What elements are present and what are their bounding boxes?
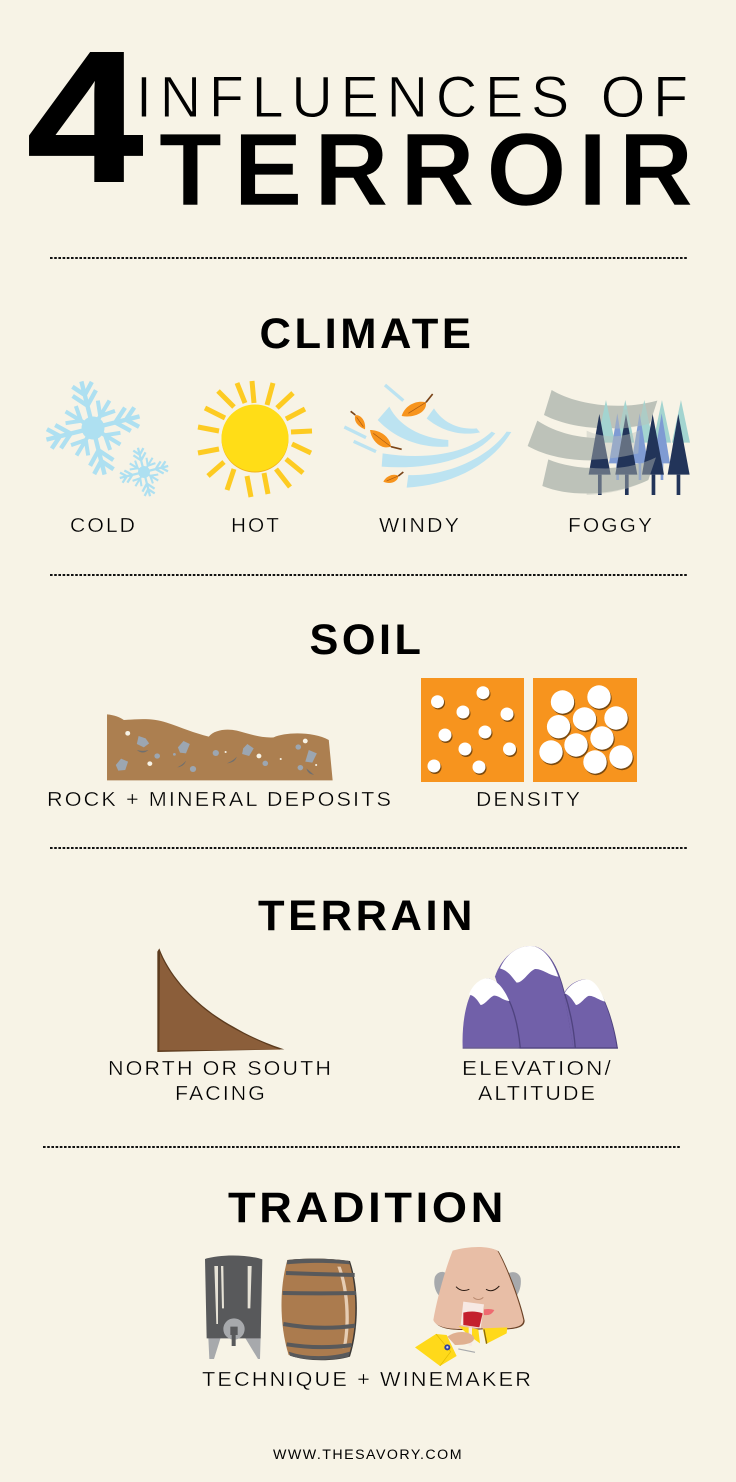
middle blue trees (609, 413, 670, 480)
heading: climate: CLIMATE (260, 310, 474, 358)
label: north or south facing (108, 1057, 333, 1105)
icon: snowy mountains (463, 946, 618, 1049)
label: foggy: FOGGY (568, 514, 654, 537)
fog bands behind trees (528, 390, 657, 494)
jacket (459, 1326, 507, 1344)
icon: high density soil square (533, 678, 637, 782)
wine glass (461, 1302, 484, 1328)
head (435, 1248, 525, 1330)
heading: tradition: TRADITION (228, 1184, 507, 1232)
icon: sun (198, 381, 312, 497)
hand (447, 1332, 474, 1345)
icon: fog and trees (528, 390, 690, 495)
label: north or south facing: FACING (175, 1082, 267, 1105)
label: hot: HOT (231, 514, 281, 537)
title numeral 4: 4 (27, 14, 143, 221)
label: cold: COLD (70, 514, 137, 537)
hair (434, 1272, 521, 1298)
label: density: DENSITY (476, 788, 582, 811)
mountain shadow (463, 947, 618, 1049)
label: elevation / altitude (462, 1057, 613, 1105)
icon: snowflakes (35, 370, 174, 502)
label: elevation / altitude: ELEVATION/ (462, 1057, 613, 1080)
heading: soil: SOIL (310, 616, 424, 664)
footer url: WWW.THESAVORY.COM (273, 1447, 463, 1462)
eyes (456, 1286, 499, 1291)
heading: terrain: TERRAIN (258, 892, 476, 940)
front navy trees (589, 414, 690, 495)
icon: soil cross-section with rocks (107, 714, 333, 780)
title line: influences of: INFLUENCES OF (136, 65, 696, 130)
label: rock + mineral deposits: ROCK + MINERAL DEPOSITS (47, 788, 393, 811)
cuff button (444, 1344, 450, 1350)
label: elevation / altitude: ALTITUDE (478, 1082, 597, 1105)
back teal trees (597, 400, 690, 443)
label: north or south facing: NORTH OR SOUTH (108, 1057, 333, 1080)
icon: steel tank (205, 1256, 262, 1359)
nose (473, 1297, 483, 1299)
label: windy: WINDY (379, 514, 461, 537)
title (27, 14, 705, 227)
sleeve (415, 1334, 457, 1366)
icon: low density soil square (421, 678, 524, 782)
icon: wooden barrel (281, 1259, 357, 1360)
tongue (484, 1309, 494, 1315)
icon: slope (157, 948, 284, 1052)
ridge lines (509, 993, 575, 1048)
fog over trees (587, 401, 657, 495)
label: technique + winemaker: TECHNIQUE + WINEMAKER (202, 1368, 533, 1391)
icon: wind and leaves (344, 385, 511, 488)
icon: winemaker (415, 1247, 525, 1366)
title line: terroir: TERROIR (159, 112, 705, 227)
